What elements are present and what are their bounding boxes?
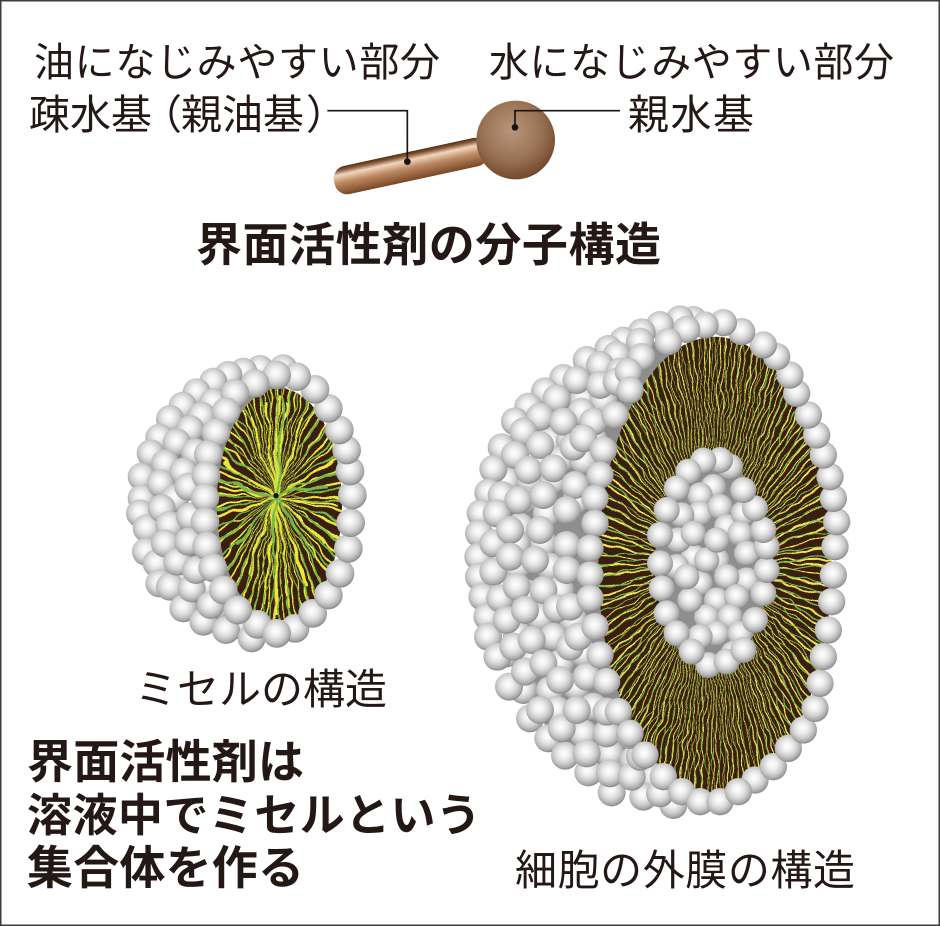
diagram: cell membrane [464, 305, 850, 819]
label: hydrophilic group: 親水基 [628, 92, 754, 138]
micelle back spheres [126, 354, 335, 652]
membrane front rim spheres [576, 309, 850, 815]
label: hydrophobic group: ） [306, 92, 347, 138]
heading: molecular structure: 界面活性剤の分子構造 [196, 219, 661, 271]
diagram: micelle [126, 354, 367, 652]
micelle front rim spheres [191, 361, 367, 648]
label: water-friendly part: 水になじみやすい部分 [489, 41, 894, 85]
micelle core with fibers [217, 388, 342, 620]
label: hydrophobic group: 親油基 [181, 92, 304, 138]
label: oil-friendly part: 油になじみやすい部分 [34, 41, 440, 85]
label: hydrophobic group: （ [141, 92, 182, 138]
membrane core with fibers [598, 337, 832, 793]
heading: micelle statement: 溶液中でミセルという [27, 790, 481, 841]
heading: micelle statement: 集合体を作る [27, 842, 304, 894]
caption: micelle structure: ミセルの構造 [135, 666, 387, 713]
inner vesicle spheres [647, 447, 780, 678]
icon: surfactant molecule [327, 101, 620, 197]
heading: micelle statement: 界面活性剤は [27, 736, 304, 788]
caption: cell membrane structure: 細胞の外膜の構造 [515, 847, 855, 894]
membrane back spheres [464, 305, 795, 819]
heading: micelle statement [27, 736, 481, 894]
label: hydrophobic group: 疎水基 [29, 92, 152, 138]
